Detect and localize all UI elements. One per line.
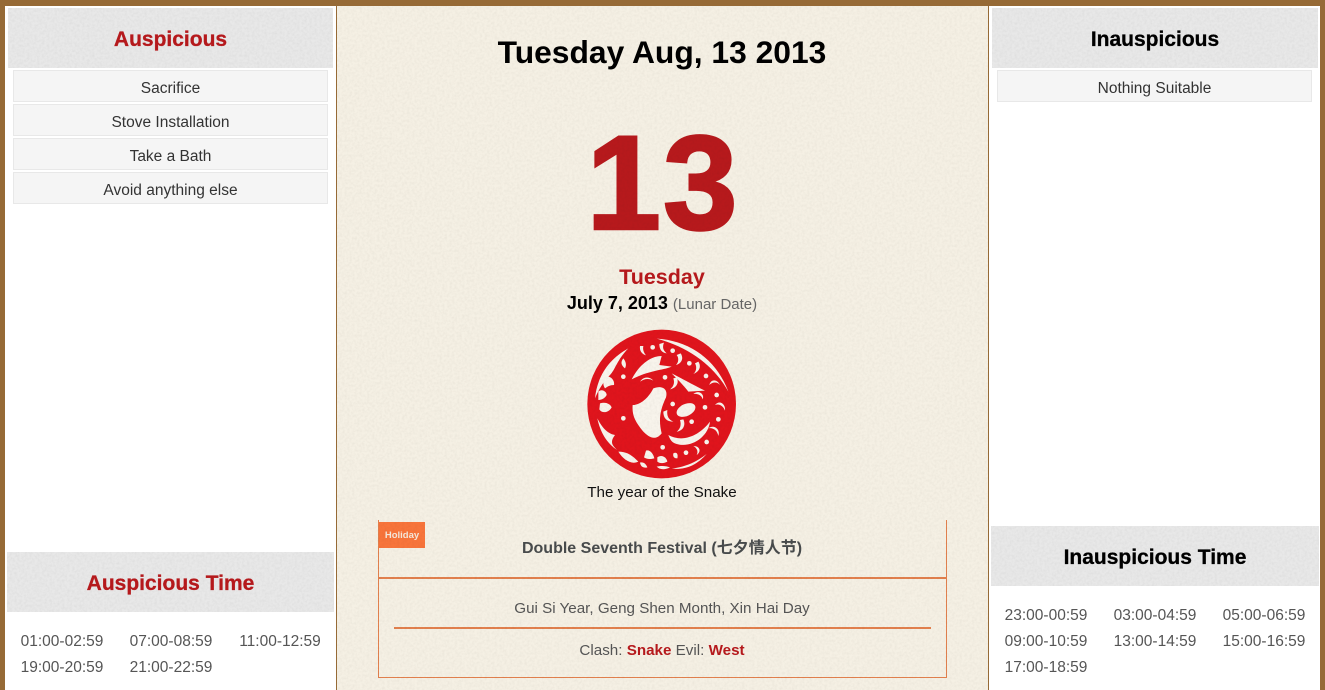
divider [379,577,946,579]
lunar date: July 7, 2013 (Lunar Date) [567,293,757,313]
item: take a bath: Take a Bath [130,148,211,165]
item: avoid anything else [13,172,328,204]
inauspicious time list: 17:00-18:59 [1005,659,1087,676]
divider [394,627,931,629]
inauspicious time list: 15:00-16:59 [1223,633,1305,650]
inauspicious time list: 05:00-06:59 [1223,607,1305,624]
item: sacrifice: Sacrifice [141,80,200,97]
heading: auspicious: Auspicious [114,28,227,51]
auspicious time list [21,633,321,676]
weekday: Tuesday [619,265,705,289]
auspicious time list: 21:00-22:59 [130,659,212,676]
auspicious time list: 01:00-02:59 [21,633,103,650]
heading: auspicious [8,8,333,68]
holiday tag [379,522,425,548]
holiday tag: Holiday [385,530,419,541]
icon: paper-cut snake emblem [587,330,736,478]
caption: year of the snake: The year of the Snake [587,484,737,501]
inauspicious time list [1005,607,1305,676]
clash and evil: Clash: Snake Evil: West [579,642,745,659]
auspicious time list: 19:00-20:59 [21,659,103,676]
panel: calendar centre [336,6,989,690]
inauspicious time list: 23:00-00:59 [1005,607,1087,624]
heading: inauspicious [992,8,1318,68]
ganzhi text: Gui Si Year, Geng Shen Month, Xin Hai Day [514,600,810,617]
heading: auspicious time [7,552,334,612]
heading: inauspicious: Inauspicious [1091,28,1219,51]
item: avoid anything else: Avoid anything else [103,182,238,199]
panel: holiday box [378,520,947,678]
item: sacrifice [13,70,328,102]
item: take a bath [13,138,328,170]
item: stove installation: Stove Installation [111,114,230,131]
festival name: Double Seventh Festival (七夕情人节) [522,540,802,557]
inauspicious time list: 13:00-14:59 [1114,633,1196,650]
heading: inauspicious time: Inauspicious Time [1064,546,1246,569]
heading: inauspicious time [991,526,1319,586]
item: stove installation [13,104,328,136]
auspicious time list: 07:00-08:59 [130,633,212,650]
inauspicious time list: 09:00-10:59 [1005,633,1087,650]
auspicious time list: 11:00-12:59 [239,633,321,650]
item: nothing suitable [997,70,1312,102]
date title: Tuesday Aug, 13 2013 [498,34,826,70]
big day number: 13 [586,109,740,258]
inauspicious time list: 03:00-04:59 [1114,607,1196,624]
item: nothing suitable: Nothing Suitable [1098,80,1211,97]
heading: auspicious time: Auspicious Time [87,572,254,595]
